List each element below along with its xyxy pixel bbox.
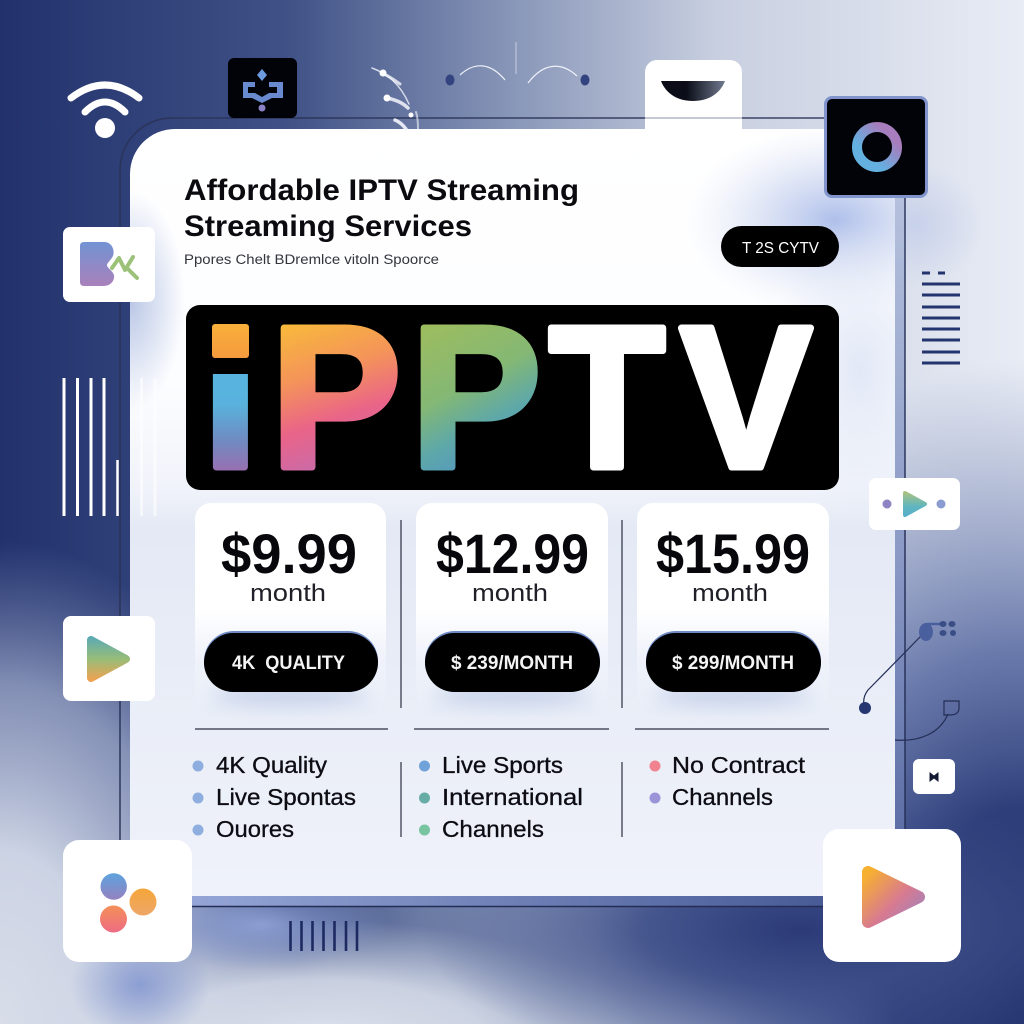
feature list 3: Channels [672, 784, 773, 810]
IPTV banner: i [202, 295, 258, 508]
plan card 1 [195, 503, 386, 715]
plan card 3 [637, 503, 829, 715]
feature list 2 [419, 752, 583, 842]
panel edge bands [190, 197, 905, 906]
icon: right stacked lines [922, 273, 960, 363]
plan card 2: $12.99 [436, 522, 589, 585]
title: Streaming Services [184, 210, 472, 243]
icon: left B card [63, 227, 155, 302]
plan card 3: $ 299/MONTH [672, 653, 794, 674]
icon: three dots card [63, 840, 192, 962]
icon: ring tile [824, 96, 928, 198]
IPTV banner [186, 284, 839, 510]
icon: light wisps [372, 68, 418, 129]
IPTV banner: P [271, 284, 401, 510]
plan card 3: $15.99 [656, 522, 810, 585]
feature list 3: No Contract [672, 752, 806, 778]
icon: top arcs with dots [446, 42, 590, 86]
badge pill: T 2S CYTV [742, 240, 819, 257]
icon: right play card [869, 478, 960, 530]
feature list 2: International [442, 784, 583, 810]
feature list 1 [192, 752, 356, 842]
feature list 2: Channels [442, 816, 544, 842]
IPTV banner: P [411, 284, 541, 510]
icon: top white tab [645, 60, 742, 129]
icon: wifi [71, 85, 139, 138]
feature list 1: Ouores [216, 816, 294, 842]
plan card 1: $9.99 [221, 522, 357, 585]
subtitle: Ppores Chelt BDremlce vitoln Spoorce [184, 252, 439, 267]
plan card 2 [416, 503, 608, 715]
title [184, 174, 579, 243]
plan card 2: month [472, 580, 548, 607]
bottom tick marks [290, 921, 357, 951]
feature list 3 [650, 752, 806, 810]
plan card 3: month [692, 580, 768, 607]
icon: wiring with nodes [859, 621, 959, 740]
plan card 1: 4K QUALITY [232, 653, 345, 674]
plan card 2: $ 239/MONTH [451, 653, 573, 674]
plan card 1: month [250, 580, 326, 607]
main panel [130, 129, 895, 896]
icon: small bowtie card [913, 759, 955, 794]
feature list 1: Live Spontas [216, 784, 356, 810]
icon: left play card [63, 616, 155, 701]
frame outline [120, 118, 824, 840]
IPTV banner: T [549, 284, 665, 510]
feature list 2: Live Sports [442, 752, 563, 778]
feature list 1: 4K Quality [216, 752, 328, 778]
left white stripes [64, 378, 155, 516]
title: Affordable IPTV Streaming [184, 174, 579, 207]
badge pill [721, 226, 839, 267]
icon: large play card [823, 829, 961, 962]
IPTV banner: V [680, 284, 812, 510]
icon: top black tile [228, 58, 297, 118]
